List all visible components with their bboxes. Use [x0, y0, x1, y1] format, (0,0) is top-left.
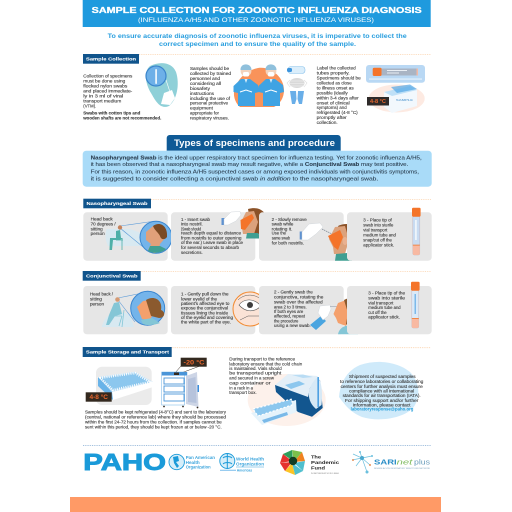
callout: shipping requirements: standards for air transportation (IATA).: [343, 393, 421, 398]
text: storage temperatures: within the first 24-72 hours from the collection. If samples cannot be: [85, 419, 223, 424]
text: labelling and refrigeration: symptoms) and: [317, 105, 347, 110]
card: step 1 insert swab: from nostrils to outer opening: [181, 235, 242, 240]
card: step 3 place in vial: swab into sterile: [363, 222, 394, 227]
illustration: refrigerated sample box: 4-8 °C: [370, 99, 386, 105]
card: step 1 pull down eyelid: lower eyelid of the: [181, 296, 218, 301]
card: step 1 pull down eyelid: 1 - Gently pull down the: [181, 292, 229, 297]
card: step 2 swab conjunctiva: [259, 286, 365, 334]
logo: The Pandemic Fund: Fund: [311, 466, 325, 471]
heading: types of specimens and procedure: [167, 135, 341, 151]
text: trained personnel: considering all: [190, 81, 221, 86]
text: trained personnel: including the use of: [190, 96, 231, 101]
heading: conjunctival swab: [83, 271, 141, 281]
illustration: patient head with swab path: [240, 208, 267, 238]
logo: The Pandemic Fund: The: [311, 454, 321, 459]
logo: PAHO emblem and name: Organization: [186, 464, 211, 470]
text: cold chain during transport: laboratory ensure that the cold chain: [229, 361, 303, 366]
text: swab type: Collection of specimens: [83, 73, 132, 78]
heading: nasopharyngeal swab: [83, 199, 151, 208]
callout: shipping requirements: compliance with all international: [349, 388, 414, 393]
card: head position: sitting: [91, 226, 104, 231]
text: cold chain during transport: During transport to the reference: [229, 357, 296, 362]
icon: eye with lower eyelid pulled down: [233, 292, 267, 326]
text: cold chain during transport: and secured in a screw: [229, 376, 274, 381]
card: step 2 swab conjunctiva: 2 - Gently swab the: [274, 290, 313, 295]
logo: SARInet plus: [352, 451, 431, 474]
heading: sample collection: [83, 54, 139, 64]
icon: gloved hand holding swab: [222, 212, 241, 225]
icon: face mask: [287, 78, 307, 88]
text: labelling and refrigeration: collection.: [317, 120, 338, 125]
logo: PAHO emblem and name: [169, 454, 215, 470]
illustration: seated person with head tilted back: [106, 221, 172, 253]
panel: nasopharyngeal swab: [83, 199, 432, 261]
text: labelling and refrigeration: promptly after: [317, 115, 347, 120]
card: step 2 remove swab: same swab: [272, 236, 291, 241]
heading: nasopharyngeal swab: Nasopharyngeal Swab: [86, 201, 148, 206]
card: head position: 70 degrees /: [91, 221, 117, 226]
text: cold chain during transport: is maintained. Vials should: [229, 366, 282, 371]
logo: World Health Organization Americas: Organization: [236, 461, 264, 466]
card: step 3 place in vial: [347, 208, 432, 261]
card: step 3 place in vial: cut off the: [368, 310, 387, 315]
illustration: freezer at -20 C: -20 °C: [184, 361, 205, 367]
illustration: patient profile with brown hair: [334, 298, 365, 334]
text: labelling and refrigeration: Label the collected: [317, 66, 357, 71]
text: labelling and refrigeration: [317, 66, 361, 125]
card: step 1 insert swab: for several seconds to absorb: [181, 245, 240, 250]
card: step 3 place in vial: vial transport: [368, 300, 394, 305]
text: trained personnel: appropriate for: [190, 111, 220, 116]
card: step 2 swab conjunctiva: using a new swab.: [274, 323, 311, 328]
logo: SARInet plus: net: [397, 458, 414, 467]
card: step 2 swab conjunctiva: area 2 to 3 times.: [274, 305, 307, 310]
heading: sample collection: Sample Collection: [86, 56, 136, 62]
card: step 1 insert swab: of the ear.) Leave swab in place: [181, 240, 244, 245]
heading: conjunctival swab: Conjunctival Swab: [86, 274, 138, 278]
footer logos: [83, 445, 431, 475]
panel: sample collection: [82, 54, 431, 125]
card: step 3 place in vial: medium tube and: [368, 305, 401, 310]
card: step 1 insert swab: reach depth equal to distance: [181, 231, 242, 236]
text: labelling and refrigeration: Specimens should be: [317, 76, 361, 81]
text: swab type: (VTM).: [83, 103, 96, 108]
text: swab type: must be done using: [83, 78, 126, 83]
intro statement: To ensure accurate diagnosis of zoonotic influenza viruses, it is imperative to collect the: [108, 33, 407, 40]
text: swab type: transport medium: [83, 98, 122, 103]
icon: gloved hand swabbing eye: [310, 305, 338, 330]
illustration: refrigerated rack at 4-8 C: 4-8 °C: [90, 395, 109, 401]
card: head position: person: [91, 231, 105, 236]
text: swab type: Swabs with cotton tips and: [83, 111, 141, 116]
card: sitting position: Head back /: [90, 292, 114, 297]
callout: shipping requirements: information, please contact: [353, 403, 412, 408]
card: step 1 insert swab: [171, 208, 267, 261]
heading: sample storage and transport: [83, 347, 172, 357]
text: trained personnel: instructions: [190, 91, 214, 96]
text: cold chain during transport: [229, 357, 303, 395]
text: trained personnel: personal protective: [190, 101, 229, 106]
panel: conjunctival swab: [83, 271, 432, 334]
text: swab type: and placed immediate-: [83, 88, 133, 93]
card: step 2 swab conjunctiva: the procedure: [274, 318, 299, 323]
title banner: [83, 0, 431, 27]
text: swab type: [82, 73, 161, 121]
card: step 1 pull down eyelid: patient's affected eye to: [181, 301, 230, 306]
card: step 1 insert swab: secretions.: [181, 250, 203, 255]
text: cold chain during transport: in a rack in a: [229, 385, 254, 390]
card: step 2 swab conjunctiva: If both eyes are: [274, 309, 304, 314]
card: step 1 insert swab: into nostril.: [181, 222, 203, 227]
card: step 1 insert swab: 1 - Insert swab: [181, 217, 211, 222]
logo: SARInet plus: SARI: [374, 458, 397, 467]
logo: The Pandemic Fund: [280, 450, 340, 475]
icon: transport medium tube: [411, 282, 420, 328]
text: storage temperatures: (central, national or reference lab) where they should be processed: [85, 414, 227, 419]
intro statement: [108, 33, 407, 48]
callout: shipping requirements: to reference laboratories or collaborating: [340, 379, 424, 384]
intro statement: correct specimen and to ensure the quality of the sample.: [159, 41, 356, 48]
text: storage temperatures: [85, 409, 227, 429]
card: step 2 remove swab: 2 - Slowly remove: [272, 217, 307, 222]
card: step 1 pull down eyelid: expose the conjunctival: [181, 306, 228, 311]
callout: nasopharyngeal versus conjunctival swab: Nasopharyngeal Swab is the ideal upper respiratory tract specimen for influenza testing. Yet for zoonotic influenza A/H5,: [91, 155, 422, 161]
card: sitting position: [83, 286, 168, 334]
card: step 3 place in vial: medium tube and: [363, 232, 397, 237]
illustration: refrigerated sample box: [367, 84, 425, 113]
text: trained personnel: personnel and: [190, 76, 221, 81]
card: step 2 remove swab: swab while: [272, 222, 294, 227]
logo: World Health Organization Americas: [220, 454, 264, 472]
text: cold chain during transport: transport box.: [229, 390, 257, 395]
icon: goggles: [287, 66, 305, 74]
text: cold chain during transport: be transported upright: [229, 371, 282, 376]
card: sitting position: sitting: [90, 297, 103, 302]
callout: nasopharyngeal versus conjunctival swab: For this reason, in zoonotic influenza A/H5 suspected cases or among exposed individuals with conjunctivitis symptoms,: [91, 169, 419, 175]
text: trained personnel: Samples should be: [190, 66, 230, 71]
card: step 2 remove swab: [259, 212, 360, 261]
text: trained personnel: collected by trained: [190, 71, 232, 76]
text: labelling and refrigeration: within 3-4 days after: [317, 95, 359, 100]
panel: sample storage and transport: [83, 347, 431, 429]
icon: flocked swab and glove: [146, 63, 178, 107]
card: step 1 insert swab: (Swab should: [181, 226, 202, 231]
card: step 1 pull down eyelid: [171, 286, 267, 334]
text: labelling and refrigeration: refrigerated (4-8 °C): [317, 110, 358, 115]
callout: shipping requirements: Shipment of suspected samples: [349, 374, 416, 379]
logo: SARInet plus: plus: [414, 458, 430, 467]
card: step 2 swab conjunctiva: conjunctiva, rotating the: [274, 295, 324, 300]
callout: shipping requirements: [339, 362, 424, 419]
icon: gloves: [290, 91, 304, 104]
card: step 3 place in vial: 3 - Place tip of the: [368, 291, 406, 296]
text: trained personnel: respiratory viruses.: [190, 116, 229, 121]
icon: transport medium tube: [412, 208, 421, 255]
footer band: [70, 497, 441, 512]
text: storage temperatures: sent within this period, they should be kept frozen at or below -20 °C.: [85, 424, 222, 429]
logo: PAHO emblem and name: Health: [186, 460, 200, 465]
callout: shipping requirements: For shipping support and/or further: [345, 398, 419, 403]
logo: The Pandemic Fund: IN PARTNERSHIP WORLD BANK: [311, 472, 340, 475]
card: sitting position: person: [90, 302, 105, 307]
callout: nasopharyngeal versus conjunctival swab: [83, 151, 432, 187]
card: step 3 place in vial: vial transport: [363, 227, 388, 232]
card: step 2 remove swab: rotating it.: [272, 226, 292, 231]
text: trained personnel: equipment: [190, 106, 214, 111]
card: head position: Head back: [91, 217, 114, 222]
illustration: patient head with nostril highlighted: [328, 224, 360, 261]
illustration: seated person with head back: [102, 291, 165, 327]
logo: World Health Organization Americas: World Health: [236, 456, 264, 461]
card: step 3 place in vial: 3 - Place tip of: [363, 217, 393, 222]
heading: types of specimens and procedure: Types of specimens and procedure: [174, 137, 335, 148]
card: step 1 pull down eyelid: tissues lining the inside: [181, 310, 229, 315]
text: swab type: ly in 3 ml of viral: [83, 93, 123, 98]
illustration: labelled tube: [366, 65, 425, 83]
card: step 3 place in vial: snap/cut off the: [363, 237, 393, 242]
logo: PAHO emblem and name: Pan American: [186, 455, 215, 460]
card: step 3 place in vial: applicator stick.: [363, 242, 394, 247]
text: labelling and refrigeration: tubes properly.: [317, 71, 350, 76]
logo: PAHO: PAHO: [83, 449, 166, 475]
logo: The Pandemic Fund: Pandemic: [311, 460, 339, 465]
card: step 3 place in vial: swab into sterile: [368, 296, 406, 301]
card: step 3 place in vial: [347, 282, 432, 334]
text: swab type: flocked nylon swabs: [83, 83, 127, 88]
text: labelling and refrigeration: collected as close: [317, 80, 352, 86]
text: cold chain during transport: cap container or: [229, 381, 272, 386]
illustration: refrigerated sample box: SAMPLE: [396, 98, 413, 102]
card: head position: [83, 212, 172, 261]
card: step 2 remove swab: Use the: [272, 231, 287, 236]
callout: nasopharyngeal versus conjunctival swab: it has been observed that a nasopharyngeal swab may result negative, while a Conjunctival Swab may test positive.: [91, 162, 409, 168]
text: trained personnel: [190, 66, 232, 121]
title: SAMPLE COLLECTION FOR ZOONOTIC INFLUENZA DIAGNOSIS: [92, 5, 422, 15]
text: storage temperatures: Samples should be kept refrigerated (4-8°C) and sent to the laboratory: [85, 409, 227, 414]
callout: shipping requirements: centers for further analysis must ensure: [341, 384, 424, 389]
logo: World Health Organization Americas: Americas: [237, 468, 252, 472]
callout: nasopharyngeal versus conjunctival swab: it is suggested to consider collecting a conjunctival swab in addition to the nasopharyngeal swab.: [91, 177, 379, 183]
illustration: refrigerated rack at 4-8 C: [86, 367, 153, 405]
illustration: freezer at -20 C: [162, 358, 207, 408]
text: labelling and refrigeration: possible (ideally: [317, 90, 349, 95]
text: trained personnel: biosafety: [190, 86, 211, 91]
icon: gloved hand removing swab: [300, 223, 332, 240]
illustration: health workers in protective equipment: [234, 64, 284, 107]
card: step 2 remove swab: for both nostrils.: [272, 241, 304, 246]
card: step 1 pull down eyelid: the white part of the eye.: [181, 320, 231, 325]
card: step 2 swab conjunctiva: swab over the affected: [274, 300, 324, 305]
text: labelling and refrigeration: onset of clinical: [317, 100, 350, 105]
card: step 1 pull down eyelid: of the eyelid and covering: [181, 315, 234, 320]
card: step 2 swab conjunctiva: affected, repeat: [274, 314, 306, 319]
heading: sample storage and transport: Sample Storage and Transport: [86, 350, 170, 355]
email contact: laboratoryresponse@paho.org: [351, 407, 414, 412]
text: swab type: wooden shafts are not recommended.: [82, 116, 161, 121]
logo: SARInet plus: SEVERE ACUTE RESPIRATORY INFECTIONS NETWORK: [374, 467, 431, 470]
subtitle: (INFLUENZA A/H5 AND OTHER ZOONOTIC INFLUENZA VIRUSES): [138, 17, 374, 24]
illustration: transport box with vials: [248, 374, 326, 426]
text: labelling and refrigeration: to illness onset as: [317, 86, 354, 90]
card: step 3 place in vial: applicator stick.: [368, 315, 400, 320]
